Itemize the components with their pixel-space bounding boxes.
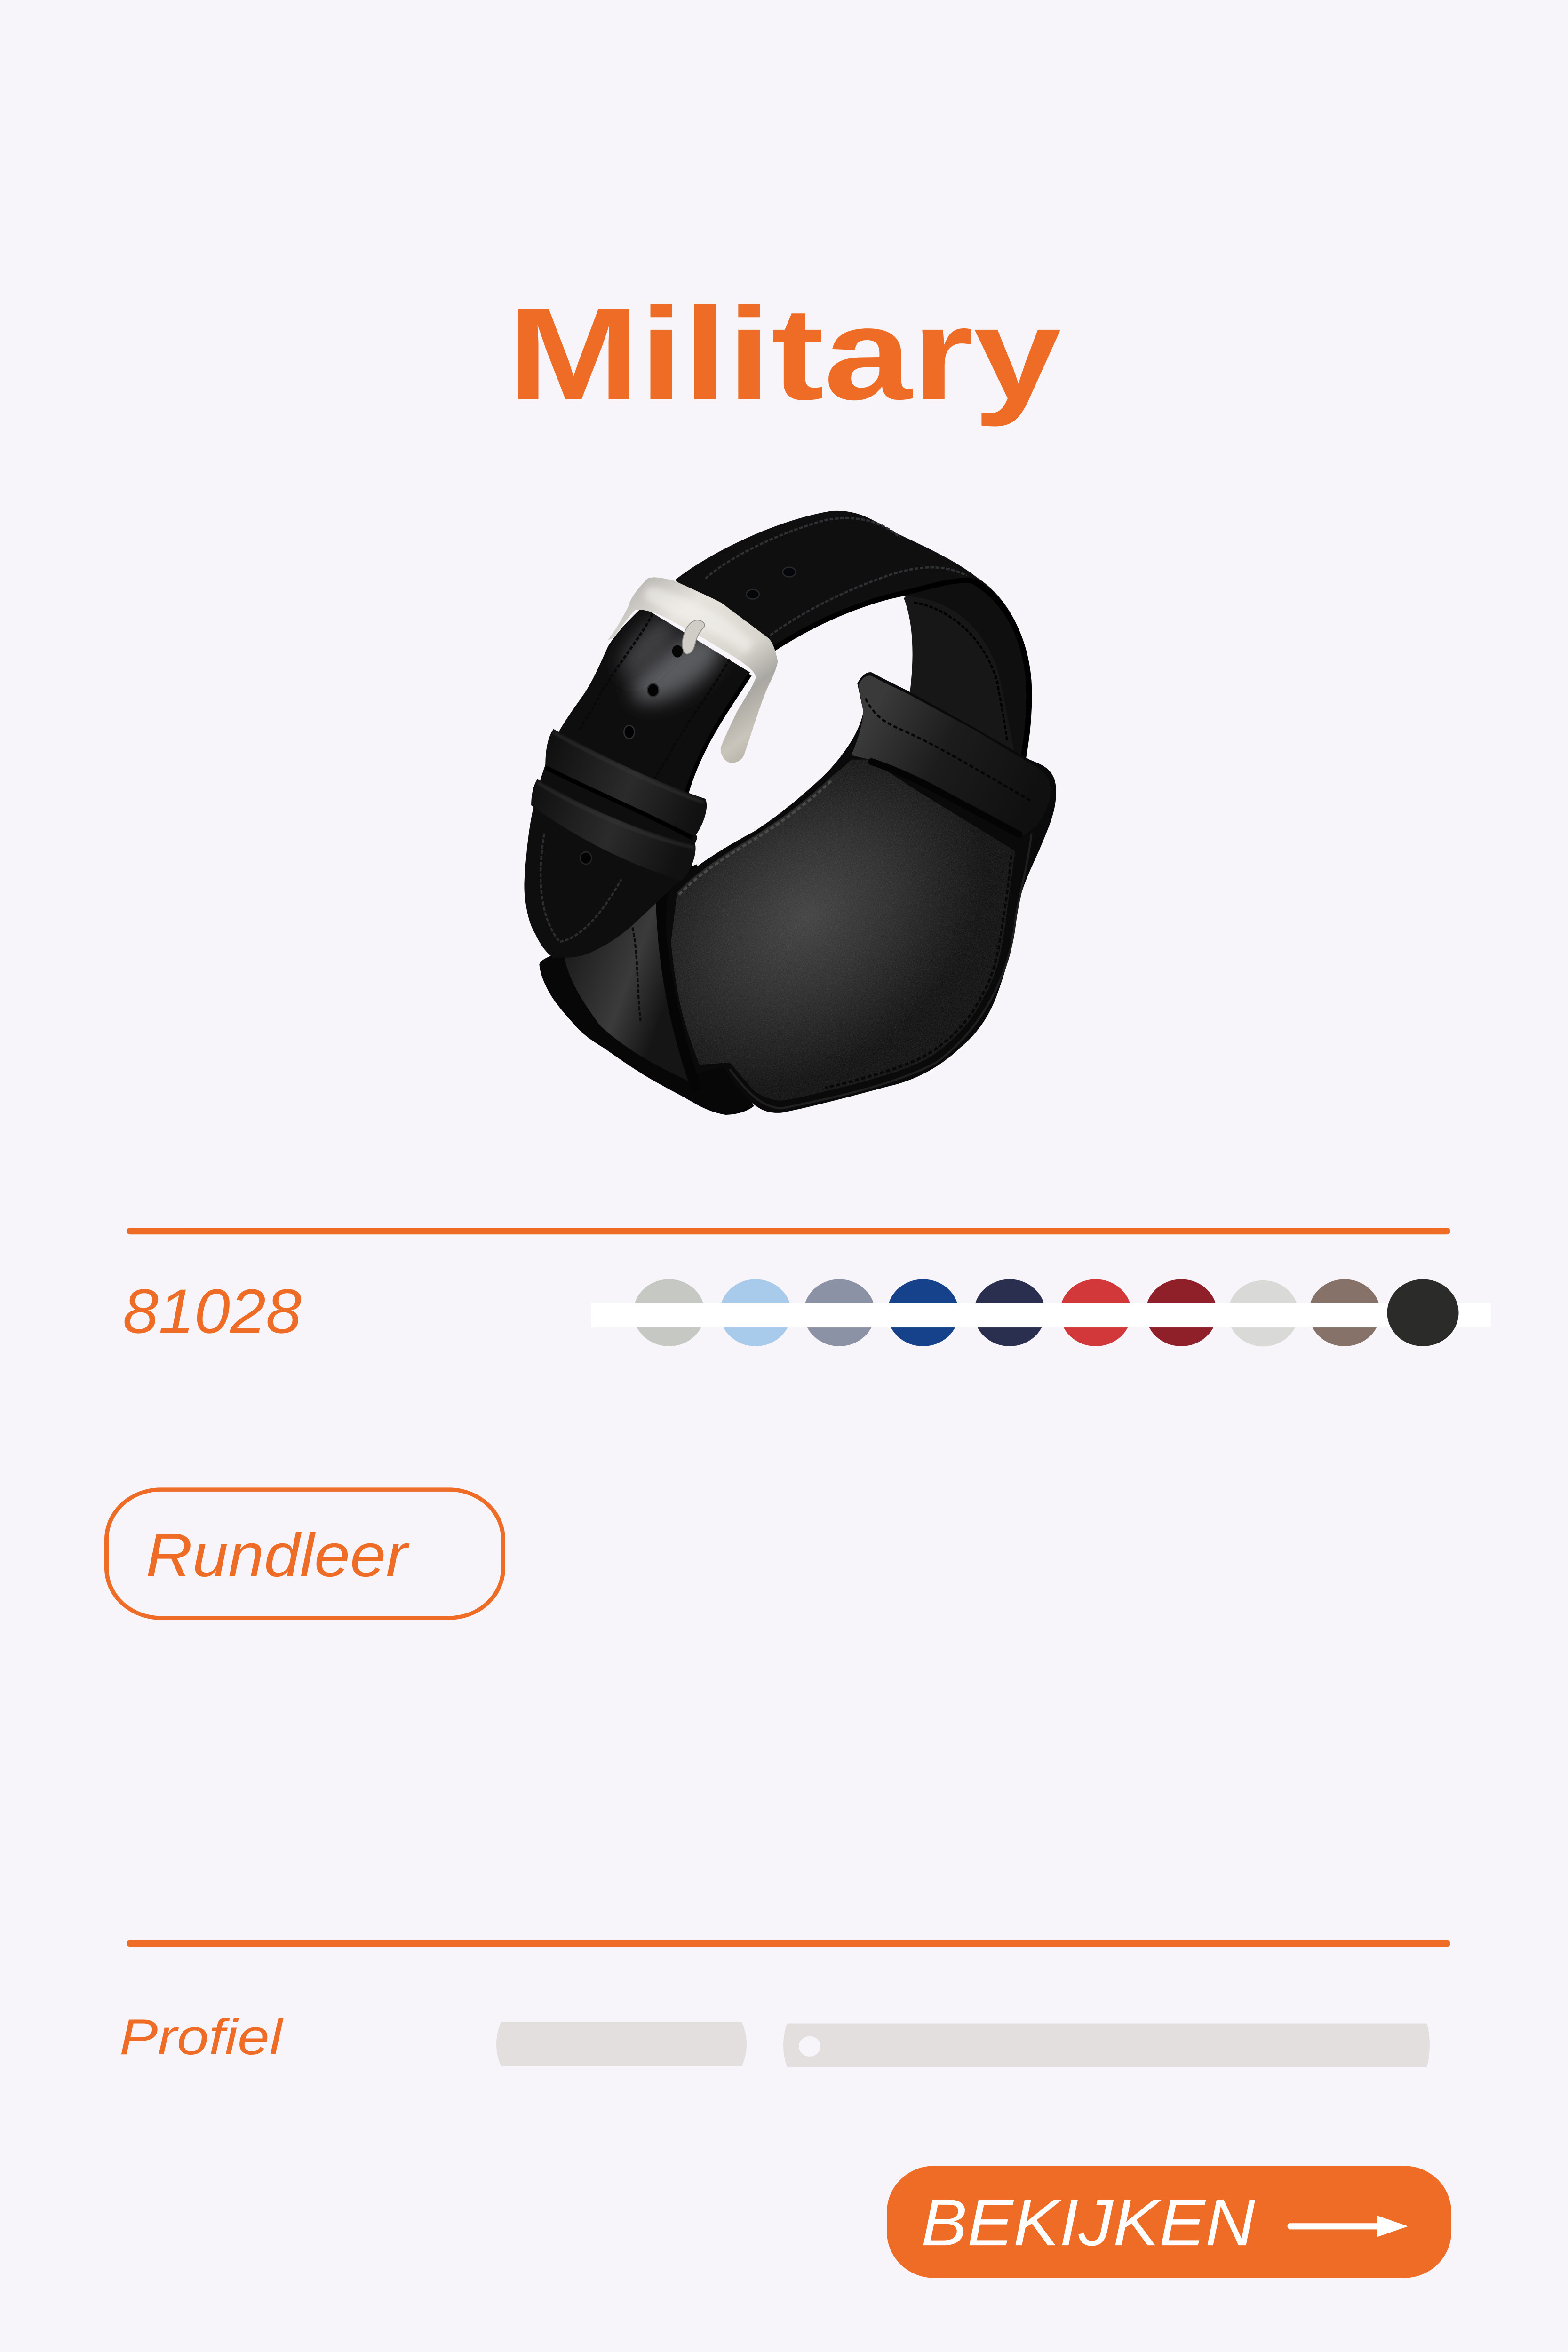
left strap with buckle holes — [524, 606, 750, 958]
material tag: Rundleer — [146, 1521, 410, 1589]
divider top — [127, 1228, 1450, 1234]
profile shape: short bar — [496, 2022, 747, 2066]
icon: arrow — [1287, 2216, 1408, 2237]
cuff top flap — [851, 675, 1051, 836]
view button: BEKIJKEN — [921, 2185, 1256, 2259]
view button — [887, 2166, 1451, 2278]
divider bottom — [127, 1940, 1450, 1947]
strap keepers — [531, 729, 707, 881]
infographic canvas — [104, 304, 1491, 2278]
title: Military — [508, 281, 1062, 428]
back strap — [675, 511, 1032, 764]
steel watch buckle — [608, 577, 778, 763]
product photo: black leather military cuff watch strap — [524, 511, 1056, 1115]
article number: 81028 — [123, 1276, 302, 1346]
buckle frame — [608, 577, 778, 763]
colour swatches — [591, 1279, 1491, 1346]
profile shape: long bar with hole — [783, 2024, 1430, 2067]
cuff lining — [666, 672, 1056, 1113]
lower band and cuff tab — [539, 864, 754, 1115]
profile label: Profiel — [119, 2009, 284, 2065]
buckle pin — [682, 620, 705, 654]
material tag — [106, 1490, 503, 1618]
